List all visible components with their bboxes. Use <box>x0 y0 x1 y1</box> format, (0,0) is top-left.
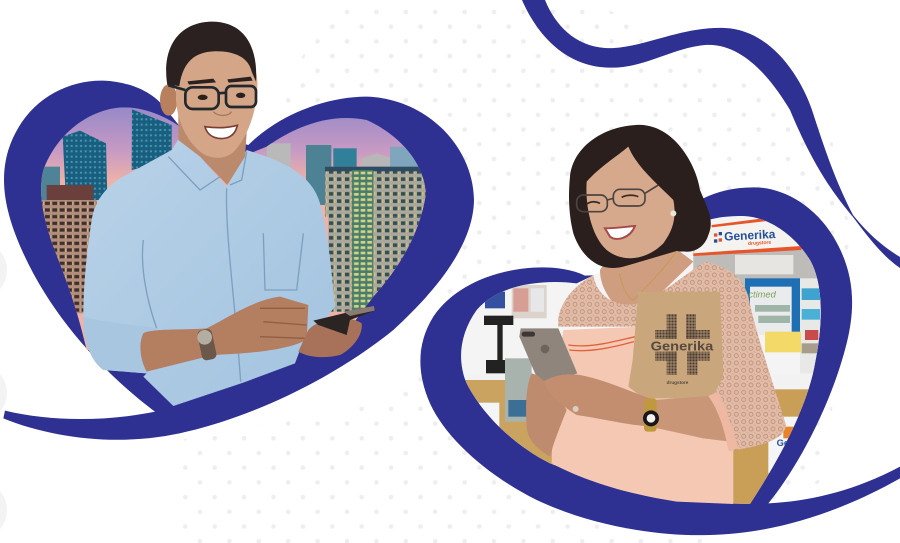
eyeglasses <box>577 185 658 212</box>
counter <box>465 380 554 465</box>
left edge pale circles <box>0 241 7 539</box>
earring <box>670 210 676 216</box>
blue heart ribbon right <box>420 187 900 535</box>
nose shadow <box>213 112 232 115</box>
shirt <box>83 137 335 406</box>
shelf unit: ctimed <box>748 290 777 300</box>
neck <box>600 243 693 310</box>
phone <box>519 328 577 385</box>
smile <box>205 125 237 139</box>
lace blouse <box>558 262 786 451</box>
necklace <box>619 252 676 300</box>
paper bag <box>628 292 723 398</box>
bag brand: Generika <box>651 339 714 353</box>
eyes <box>587 195 638 204</box>
ear <box>160 84 177 116</box>
bag sub brand: drugstore <box>667 380 689 385</box>
counter panel right <box>768 417 800 473</box>
watch <box>197 328 217 361</box>
city skyline window <box>33 100 433 353</box>
top right ribbon <box>522 0 900 268</box>
eyebrows <box>187 77 253 85</box>
bag logo cross <box>655 314 710 375</box>
dress stripes <box>568 337 635 351</box>
upper wall <box>693 250 823 290</box>
hair <box>166 22 256 86</box>
hands <box>543 374 655 427</box>
eyes <box>198 93 245 100</box>
store sign: Generika <box>724 227 776 244</box>
left forearm <box>526 373 567 457</box>
eyeglasses <box>168 85 256 109</box>
fingers <box>260 308 307 338</box>
shelf unit <box>745 278 800 335</box>
dress <box>552 327 733 504</box>
sleeve cuff <box>708 392 738 451</box>
blue heart ribbon left <box>3 81 474 440</box>
mouth <box>605 226 635 239</box>
dotted background <box>180 5 850 543</box>
hair <box>569 125 711 268</box>
panel: woman in heart <box>420 125 900 535</box>
store sign <box>693 218 802 256</box>
second hand <box>298 318 362 357</box>
forearm and hand <box>140 297 308 372</box>
ring <box>573 406 579 412</box>
air conditioner <box>735 255 793 274</box>
hair side lock <box>670 190 704 252</box>
neck <box>178 110 247 185</box>
product boxes <box>765 332 801 352</box>
phone <box>313 306 375 335</box>
posters <box>485 285 547 318</box>
phone edge <box>343 306 375 316</box>
face <box>176 48 257 158</box>
display rack <box>505 358 532 422</box>
pharmacy window <box>453 210 827 510</box>
counter panel left <box>478 402 500 427</box>
wrist watch <box>643 398 659 432</box>
store sign: drugstore <box>748 240 772 247</box>
rolled sleeve <box>83 317 158 373</box>
man figure <box>83 22 375 406</box>
panel: man in heart <box>3 22 474 440</box>
pos terminal <box>484 316 513 377</box>
shirt details <box>142 152 303 382</box>
face <box>586 147 675 258</box>
counter panel right: Ge <box>777 438 789 448</box>
right arm <box>650 396 730 442</box>
right shelves <box>800 278 823 375</box>
woman figure <box>519 125 786 504</box>
